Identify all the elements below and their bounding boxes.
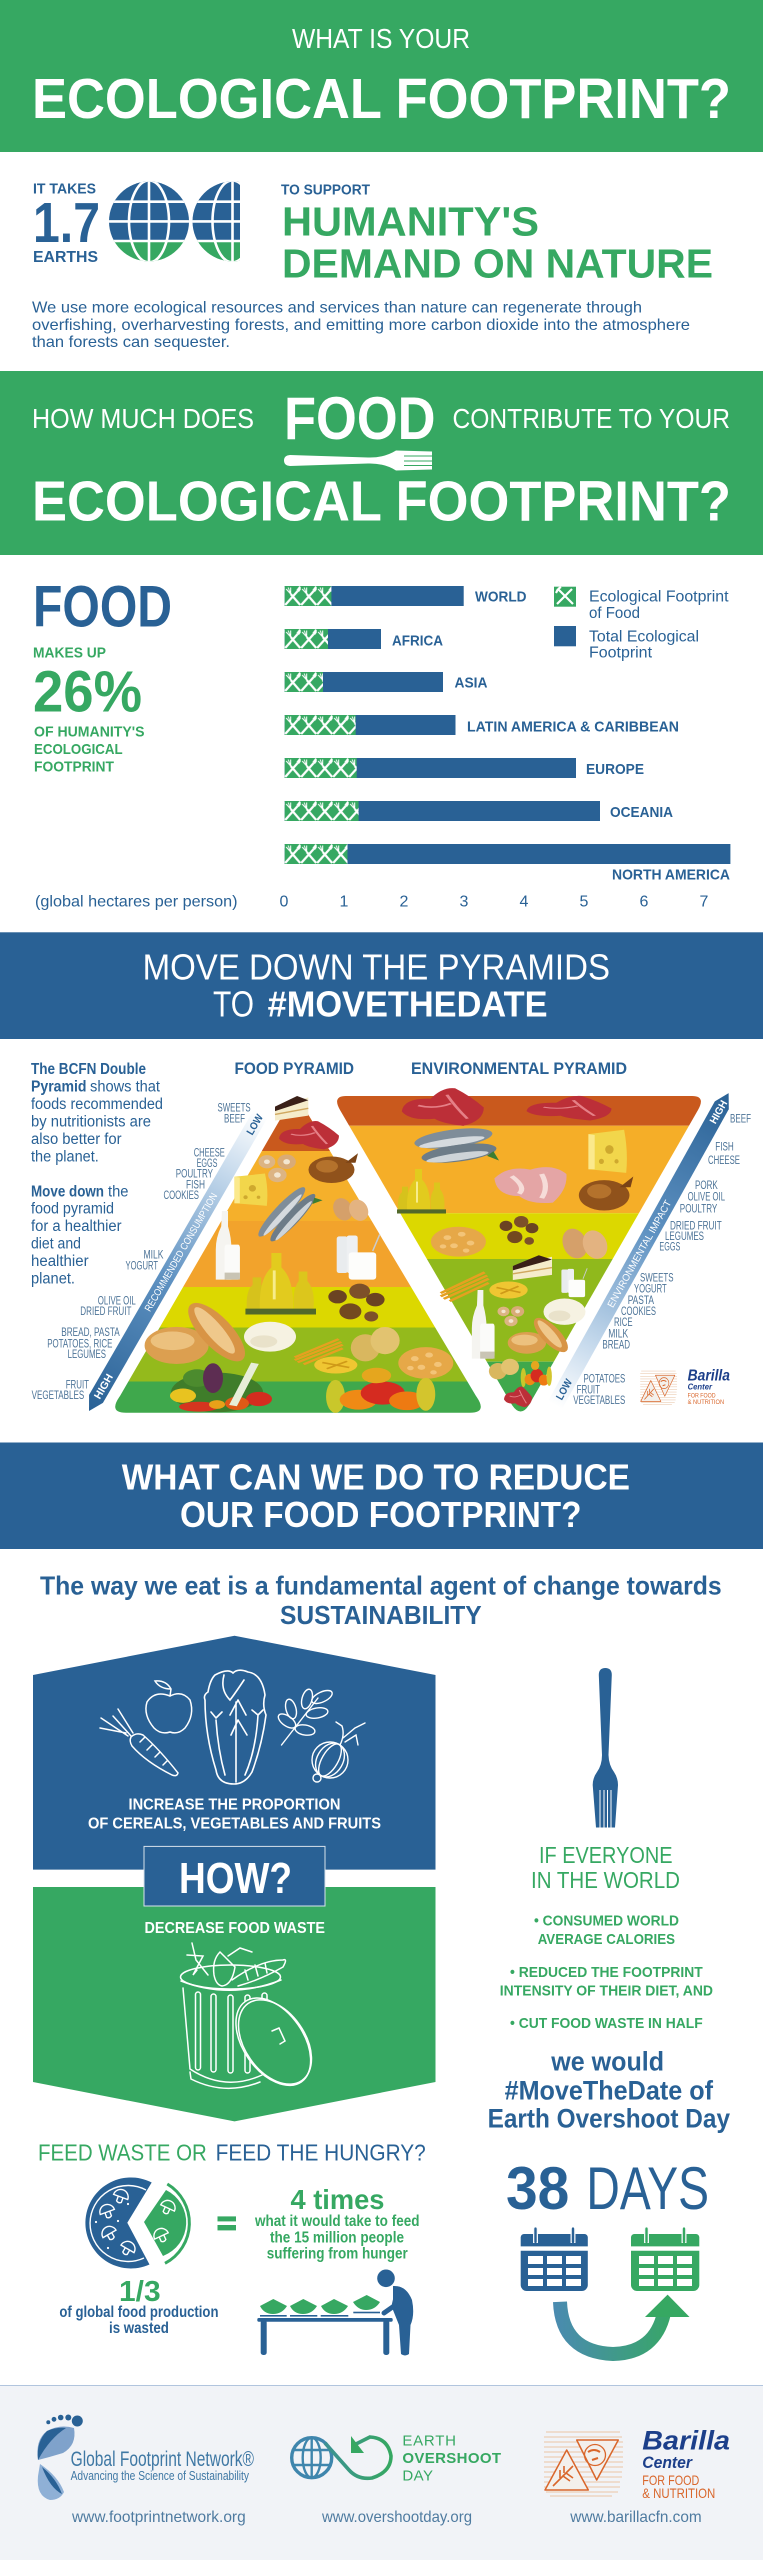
labels: environmental pyramid items: BREAD <box>602 1339 630 1351</box>
header band: move down the pyramids: MOVE DOWN THE PYRAMIDS <box>143 946 610 987</box>
axis labels: 0 <box>280 894 289 911</box>
labels: environmental pyramid items: LEGUMES <box>665 1231 704 1243</box>
header band: what is your ecological footprint <box>0 0 763 152</box>
food: olive oil <box>245 1253 316 1314</box>
logo: barilla center small <box>640 1368 730 1406</box>
stat: 38 days: 38 <box>506 2155 569 2222</box>
food: potatoes <box>351 1327 400 1361</box>
logo: earth overshoot day: OVERSHOOT <box>402 2450 501 2467</box>
text block: double pyramid explanation: also better for <box>31 1131 122 1148</box>
icon: table with plates and person <box>257 2270 413 2356</box>
arrow: environmental impact: ENVIRONMENTAL IMPACT <box>606 1199 674 1310</box>
bar: world <box>285 586 527 606</box>
labels: food pyramid items: SWEETS <box>218 1103 251 1115</box>
heading: food pyramid: FOOD PYRAMID <box>234 1060 354 1078</box>
panel: increase cereals, vegetables, fruits <box>33 1636 436 1870</box>
arrow: recommended consumption <box>82 1110 267 1415</box>
food: chickpeas <box>431 1227 486 1257</box>
icon: pizza with one third wasted <box>85 2177 189 2268</box>
food: chickpeas <box>398 1347 453 1379</box>
legend: Total Ecological <box>589 628 699 645</box>
logo: barilla center: & NUTRITION <box>642 2485 715 2501</box>
arrow: recommended consumption: LOW <box>244 1112 266 1137</box>
food: milk <box>472 1290 495 1359</box>
bar: north america <box>285 844 730 884</box>
logo: barilla center: FOR FOOD <box>642 2472 699 2488</box>
text block: double pyramid explanation: The BCFN Double <box>31 1061 146 1078</box>
labels: environmental pyramid items: RICE <box>614 1317 633 1329</box>
heading: humanity's demand on nature: DEMAND ON NATURE <box>282 240 713 286</box>
box: how <box>144 1846 325 1906</box>
text block: if everyone in the world <box>488 1842 730 2134</box>
labels: food pyramid items: EGGS <box>197 1158 218 1170</box>
food: milk bottle <box>216 1211 240 1280</box>
text block: double pyramid explanation: Pyramid <box>31 1079 86 1096</box>
labels: food pyramid items <box>32 1103 251 1402</box>
axis labels: 3 <box>460 894 469 911</box>
chart: environmental pyramid <box>330 1088 710 1422</box>
labels: environmental pyramid items: COOKIES <box>621 1306 656 1318</box>
icon: leaf sprig <box>276 1688 334 1745</box>
heading: the way we eat <box>40 1570 722 1630</box>
labels: food pyramid items: POTATOES, RICE <box>47 1338 113 1350</box>
bar: latin america and caribbean <box>285 715 679 736</box>
labels: environmental pyramid items: PORK <box>695 1180 718 1192</box>
panel: food 26 percent stat: 26% <box>33 660 142 725</box>
heading: feed waste or feed the hungry: FEED THE HUNGRY? <box>216 2140 426 2166</box>
heading line: how much does: HOW MUCH DOES <box>32 403 254 434</box>
logo: barilla center small: Center <box>688 1381 713 1391</box>
legend <box>554 587 729 661</box>
food: chicken <box>579 1176 633 1210</box>
text: 4 times: what it would take to feed <box>254 2213 420 2230</box>
labels: food pyramid items: DRIED FRUIT <box>80 1306 131 1318</box>
labels: environmental pyramid items: BEEF <box>730 1113 751 1125</box>
panel: decrease food waste <box>33 1887 436 2121</box>
labels: food pyramid items: YOGURT <box>126 1260 158 1272</box>
bullet list: • CUT FOOD WASTE IN HALF <box>510 2015 703 2032</box>
labels: food pyramid items: LEGUMES <box>68 1349 106 1361</box>
food: fish <box>411 1124 500 1167</box>
axis labels: (global hectares per person) <box>35 894 238 911</box>
panel: food 26 percent stat: MAKES UP <box>33 645 106 662</box>
heading word: food: FOOD <box>284 385 436 452</box>
text block: double pyramid explanation: food pyramid <box>31 1201 114 1218</box>
bar: north america: NORTH AMERICA <box>612 867 730 884</box>
bullet list: INTENSITY OF THEIR DIET, AND <box>500 1982 713 1999</box>
labels: food pyramid items: CHEESE <box>194 1147 225 1159</box>
labels: environmental pyramid items: CHEESE <box>708 1155 740 1167</box>
bullet list: AVERAGE CALORIES <box>538 1931 675 1948</box>
labels: environmental pyramid items: FISH <box>715 1142 734 1154</box>
arrow: environmental impact: LOW <box>554 1377 575 1402</box>
label: it takes 1.7 earths <box>33 182 100 266</box>
icon: green calendar <box>631 2229 699 2291</box>
text: decrease food waste: DECREASE FOOD WASTE <box>144 1920 325 1937</box>
panel: food 26 percent stat: FOOTPRINT <box>34 758 114 775</box>
food: bread <box>145 1299 256 1365</box>
food: pasta pieces <box>314 1356 357 1374</box>
axis labels: 1 <box>340 894 349 911</box>
text: 4 times: suffering from hunger <box>267 2246 408 2263</box>
url: overshoot day: www.overshootday.org <box>321 2509 472 2526</box>
panel: food 26 percent stat: ECOLOGICAL <box>34 741 123 758</box>
text block: double pyramid explanation: Move down <box>31 1183 104 1200</box>
text: increase the proportion: INCREASE THE PROPORTION <box>128 1797 340 1814</box>
food: cake <box>275 1096 308 1121</box>
food: pasta <box>441 1272 489 1301</box>
icon: blue calendar <box>521 2229 588 2291</box>
text: 4 times: 4 times <box>290 2184 384 2215</box>
bar: asia <box>285 672 488 692</box>
food: cake <box>513 1255 552 1280</box>
icon: apple <box>146 1681 192 1733</box>
header band: what can we do <box>0 1442 763 1549</box>
logo: barilla center: Center <box>642 2453 693 2472</box>
text: one third wasted: of global food production <box>59 2304 219 2321</box>
labels: environmental pyramid items: POTATOES <box>584 1374 626 1386</box>
logo: global footprint network: Global Footprint Network® <box>71 2448 254 2471</box>
labels: environmental pyramid items: POULTRY <box>680 1203 718 1215</box>
panel: food 26 percent stat: OF HUMANITY'S <box>34 723 144 740</box>
axis labels <box>35 894 709 911</box>
axis labels: 5 <box>580 894 589 911</box>
logo: barilla center small: Barilla <box>688 1368 730 1385</box>
food: beef cuts <box>526 1096 612 1120</box>
food: tomatoes <box>504 1386 532 1407</box>
heading line: contribute to your: CONTRIBUTE TO YOUR <box>452 403 730 434</box>
legend: Ecological Footprint <box>589 589 729 606</box>
labels: environmental pyramid items: OLIVE OIL <box>688 1192 725 1204</box>
food: potatoes <box>489 1359 519 1379</box>
heading: if everyone: IF EVERYONE <box>539 1842 672 1868</box>
header band: how much does food contribute <box>0 371 763 555</box>
labels: environmental pyramid items: SWEETS <box>640 1273 674 1285</box>
text: increase the proportion: OF CEREALS, VEGETABLES AND FRUITS <box>88 1816 381 1833</box>
logo: earth overshoot day: DAY <box>402 2467 433 2484</box>
food: fish <box>247 1178 326 1252</box>
panel: food 26 percent stat: FOOD <box>33 575 172 640</box>
arrow: recommended consumption: RECOMMENDED CONSUMPTION <box>143 1191 220 1314</box>
logo: barilla center small: & NUTRITION <box>688 1399 724 1406</box>
bar: europe: EUROPE <box>586 761 644 778</box>
header band: what can we do: WHAT CAN WE DO TO REDUCE <box>122 1456 630 1497</box>
axis labels: 7 <box>700 894 709 911</box>
logo: barilla center: Barilla <box>642 2425 730 2455</box>
icon: horizontal fork <box>284 450 433 470</box>
labels: environmental pyramid items: DRIED FRUIT <box>670 1220 722 1232</box>
labels: food pyramid items: BREAD, PASTA <box>61 1327 120 1339</box>
icon: full globe <box>109 181 189 262</box>
arrow: environmental impact: HIGH <box>708 1098 730 1126</box>
text block: explanation <box>32 300 690 351</box>
text block: double pyramid explanation: by nutritionists are <box>31 1113 151 1130</box>
bullet list <box>500 1913 713 2032</box>
food: bread <box>508 1315 575 1355</box>
food: fruit <box>326 1368 435 1413</box>
icon: carrot <box>100 1709 178 1776</box>
labels: food pyramid items: POULTRY <box>176 1169 213 1181</box>
food: olive oil <box>397 1169 446 1214</box>
labels: environmental pyramid items: FRUIT <box>577 1384 600 1396</box>
heading: the way we eat: The way we eat is a fundamental agent of change towards <box>40 1570 722 1600</box>
label: it takes 1.7 earths: 1.7 <box>33 191 100 255</box>
icon: trash can with lid <box>180 1943 327 2099</box>
url: barilla: www.barillacfn.com <box>569 2509 702 2526</box>
panel: 1.7 earths statement <box>32 178 713 351</box>
bar: africa <box>285 629 443 649</box>
text: 4 times: the 15 million people <box>270 2230 404 2246</box>
food: pasta pieces <box>489 1282 528 1298</box>
bar chart: footprint by region <box>35 586 730 911</box>
footer <box>0 2385 763 2560</box>
arrow: calendar move <box>560 2295 690 2354</box>
food: pork <box>494 1167 567 1203</box>
heading: humanity's demand on nature <box>282 199 713 286</box>
box: how: HOW? <box>179 1854 292 1903</box>
text: 4 times <box>254 2184 420 2263</box>
food: dairy <box>561 1268 587 1297</box>
stat: 38 days <box>506 2155 709 2222</box>
food: peach <box>521 1361 552 1387</box>
heading: if everyone: IN THE WORLD <box>531 1867 680 1893</box>
labels: environmental pyramid items <box>573 1113 751 1407</box>
food: rice <box>244 1322 296 1352</box>
food: donuts <box>258 1154 296 1182</box>
food: eggs <box>559 1227 611 1261</box>
labels: environmental pyramid items: PASTA <box>628 1295 654 1307</box>
food: cheese <box>234 1174 267 1206</box>
logo: barilla center <box>544 2425 730 2501</box>
text: one third wasted: 1/3 <box>119 2276 161 2308</box>
bar: oceania: OCEANIA <box>610 804 673 821</box>
legend: Footprint <box>589 644 653 661</box>
bar: oceania <box>285 801 673 821</box>
text block: explanation: overfishing, overharvesting forests, and emitting more carbon dioxide into the atmosphere <box>32 317 690 334</box>
text: one third wasted <box>59 2276 219 2337</box>
labels: food pyramid items: BEEF <box>224 1113 245 1125</box>
labels: environmental pyramid items: MILK <box>608 1328 628 1340</box>
heading: the way we eat: SUSTAINABILITY <box>280 1600 482 1630</box>
icon: equals sign <box>218 2216 236 2230</box>
statement: we would move the date: Earth Overshoot Day <box>488 2104 730 2134</box>
food: rice <box>544 1298 586 1325</box>
text block: explanation: We use more ecological resources and services than nature can regenerate through <box>32 300 642 316</box>
text block: double pyramid explanation: healthier <box>31 1253 89 1270</box>
food: chestnuts <box>500 1216 538 1245</box>
bar: africa: AFRICA <box>392 632 443 649</box>
text: increase the proportion <box>88 1797 381 1833</box>
legend: of Food <box>589 605 640 622</box>
label: it takes 1.7 earths: EARTHS <box>33 249 98 266</box>
bar: asia: ASIA <box>454 674 488 691</box>
labels: food pyramid items: OLIVE OIL <box>98 1296 136 1308</box>
text block: double pyramid explanation: the <box>108 1183 128 1200</box>
heading: environmental pyramid: ENVIRONMENTAL PYRAMID <box>411 1060 627 1078</box>
food: chestnuts <box>328 1284 385 1321</box>
food: cheese <box>588 1130 627 1173</box>
statement: we would move the date <box>488 2046 730 2134</box>
bar: europe <box>285 758 644 778</box>
label: to support: TO SUPPORT <box>281 183 370 199</box>
axis labels: 4 <box>520 894 529 911</box>
bullet list: • CONSUMED WORLD <box>534 1913 679 1930</box>
text block: double pyramid explanation: diet and <box>31 1236 81 1253</box>
food: beef <box>279 1121 339 1149</box>
food: donuts <box>498 1306 524 1326</box>
heading: feed waste or feed the hungry <box>38 2140 426 2166</box>
header band: move down the pyramids: #MOVETHEDATE <box>268 984 548 1025</box>
labels: food pyramid items: VEGETABLES <box>32 1390 84 1402</box>
header band: move down the pyramids <box>0 932 763 1039</box>
heading: humanity's demand on nature: HUMANITY'S <box>282 199 539 245</box>
logo: global footprint network: Advancing the Science of Sustainability <box>71 2468 249 2483</box>
food: vegetables <box>170 1363 272 1412</box>
header band: move down the pyramids: TO <box>213 984 254 1025</box>
icon: onion <box>310 1722 365 1782</box>
url: footprint network: www.footprintnetwork.org <box>71 2509 246 2526</box>
icon: lettuce <box>204 1670 266 1784</box>
bar: latin america and caribbean: LATIN AMERICA & CARIBBEAN <box>467 719 679 736</box>
logo: earth overshoot day <box>292 2433 501 2484</box>
text block: double pyramid explanation: planet. <box>31 1270 75 1287</box>
labels: food pyramid items: FISH <box>186 1179 205 1191</box>
axis labels: 2 <box>400 894 409 911</box>
food: pasta <box>295 1339 343 1364</box>
text block: double pyramid explanation: for a healthier <box>31 1218 122 1235</box>
icon: partial globe <box>192 181 240 262</box>
statement: we would move the date: we would <box>550 2046 664 2076</box>
icon: vertical fork <box>593 1668 618 1828</box>
food: dairy <box>337 1234 380 1280</box>
heading line: what is your: WHAT IS YOUR <box>292 23 470 54</box>
arrow: recommended consumption: HIGH <box>92 1372 116 1401</box>
food: beef large <box>402 1088 484 1126</box>
labels: environmental pyramid items: EGGS <box>659 1242 681 1254</box>
text block: explanation: than forests can sequester. <box>32 334 230 351</box>
labels: food pyramid items: MILK <box>144 1249 164 1261</box>
text block: double pyramid explanation: shows that <box>90 1079 161 1096</box>
heading: if everyone <box>531 1842 680 1893</box>
statement: we would move the date: #MoveTheDate of <box>505 2075 714 2105</box>
heading: feed waste or feed the hungry: FEED WASTE OR <box>38 2140 207 2166</box>
arrow: environmental impact <box>548 1089 736 1409</box>
panel: food 26 percent stat <box>33 575 172 775</box>
logo: earth overshoot day: EARTH <box>402 2433 456 2450</box>
label: it takes 1.7 earths: IT TAKES <box>33 182 96 198</box>
text block: double pyramid explanation: foods recommended <box>31 1096 163 1113</box>
food: chicken <box>308 1153 358 1183</box>
stat: 38 days: DAYS <box>586 2155 709 2222</box>
labels: environmental pyramid items: VEGETABLES <box>573 1395 626 1407</box>
bullet list: • REDUCED THE FOOTPRINT <box>510 1964 703 1981</box>
chart: food pyramid <box>115 1096 481 1413</box>
labels: food pyramid items: COOKIES <box>164 1190 199 1202</box>
text block: double pyramid explanation <box>31 1061 163 1287</box>
text block: double pyramid explanation: the planet. <box>31 1148 99 1165</box>
labels: environmental pyramid items: YOGURT <box>634 1284 667 1296</box>
labels: food pyramid items: FRUIT <box>66 1379 89 1391</box>
text: one third wasted: is wasted <box>109 2320 169 2337</box>
axis labels: 6 <box>640 894 649 911</box>
header band: what can we do: OUR FOOD FOOTPRINT? <box>180 1494 582 1535</box>
logo: barilla center small: FOR FOOD <box>688 1392 716 1399</box>
food: eggs <box>331 1197 371 1222</box>
logo: global footprint network <box>37 2414 254 2500</box>
bar: world: WORLD <box>475 589 527 606</box>
